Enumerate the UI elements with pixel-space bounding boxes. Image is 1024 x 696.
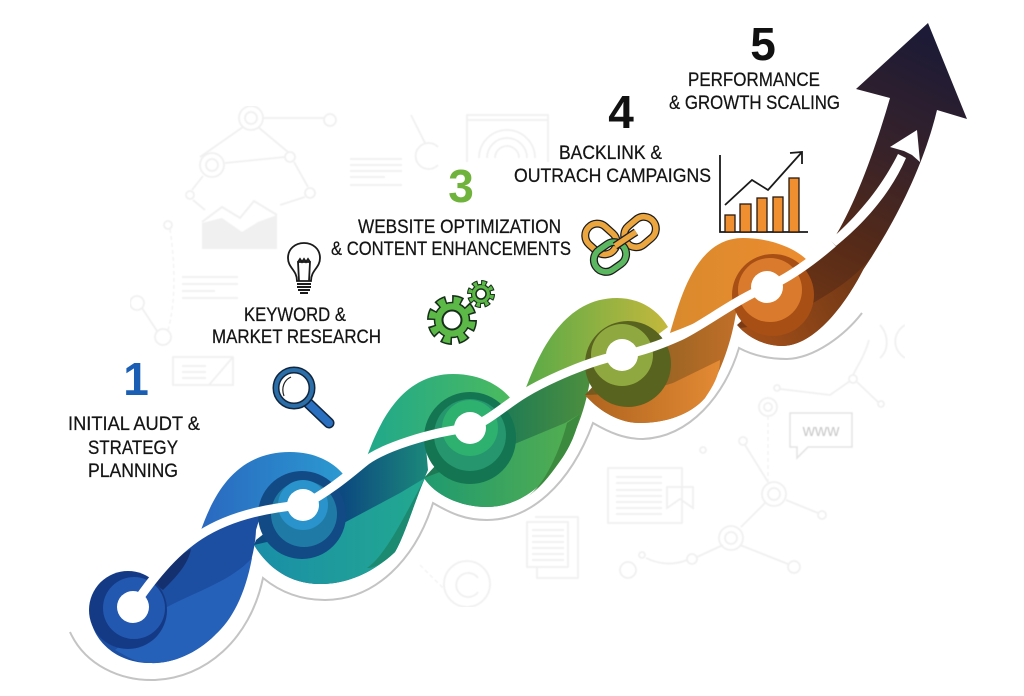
step 3 label: WEBSITE OPTIMIZATION bbox=[358, 217, 561, 238]
segment: orange lobes bbox=[585, 238, 807, 423]
disc 2 bbox=[258, 471, 346, 559]
step 2 label: KEYWORD & bbox=[244, 305, 346, 326]
step 5 label bbox=[669, 18, 840, 114]
step 1 label bbox=[68, 353, 200, 482]
step 1 label: PLANNING bbox=[88, 461, 178, 482]
disc 3 bbox=[424, 392, 516, 484]
step 4 label: BACKLINK & bbox=[559, 143, 662, 164]
background browser window bbox=[467, 115, 548, 162]
step 5 label: & GROWTH SCALING bbox=[669, 93, 840, 114]
background circles upper middle bbox=[411, 115, 438, 169]
background network right bbox=[620, 340, 884, 578]
icon: gears bbox=[432, 283, 492, 340]
big arrow bbox=[737, 23, 967, 346]
white progress line bbox=[133, 130, 920, 607]
background refresh circle bbox=[420, 561, 490, 607]
step 5 label: 5 bbox=[750, 18, 776, 70]
step 3 label bbox=[331, 160, 571, 260]
background area chart bbox=[202, 201, 277, 249]
disc 5 bbox=[732, 254, 814, 336]
disc 1 bbox=[89, 571, 167, 649]
background envelope bbox=[173, 357, 233, 385]
segment: teal lobes bbox=[254, 374, 512, 584]
background network top left bbox=[186, 106, 336, 210]
background document with bookmark bbox=[608, 468, 693, 523]
step 4 label: 4 bbox=[608, 86, 634, 138]
background stacked pages bbox=[527, 517, 578, 578]
step 2 label: MARKET RESEARCH bbox=[212, 327, 381, 348]
step 4 label: OUTRACH CAMPAIGNS bbox=[514, 166, 711, 187]
step 1 label: INITIAL AUDT & bbox=[68, 414, 200, 435]
icon: chain links bbox=[580, 212, 661, 277]
icon: light bulb bbox=[288, 243, 320, 293]
background: faint network and document icons bbox=[130, 106, 905, 607]
step 4 label bbox=[514, 86, 711, 187]
icon: magnifying glass bbox=[276, 370, 329, 423]
segment: blue lobes bbox=[90, 452, 343, 663]
white step nodes bbox=[117, 271, 783, 623]
step 1 label: 1 bbox=[123, 353, 149, 405]
background arcs right bbox=[880, 325, 905, 358]
segment: green lobes bbox=[424, 298, 668, 507]
step 1 label: STRATEGY bbox=[88, 438, 178, 459]
step 3 label: 3 bbox=[448, 160, 474, 212]
background www speech bubble: www bbox=[802, 421, 840, 440]
icon: growth bar chart bbox=[720, 152, 808, 232]
background left node bbox=[130, 221, 174, 345]
background text lines bbox=[182, 159, 402, 298]
background www speech bubble bbox=[790, 413, 852, 458]
disc 4 bbox=[585, 321, 671, 407]
step 2 label bbox=[212, 305, 381, 348]
gray outline under ribbon bbox=[70, 313, 862, 680]
step 5 label: PERFORMANCE bbox=[688, 70, 820, 91]
ribbon growth path bbox=[89, 23, 967, 663]
step 3 label: & CONTENT ENHANCEMENTS bbox=[331, 239, 571, 260]
